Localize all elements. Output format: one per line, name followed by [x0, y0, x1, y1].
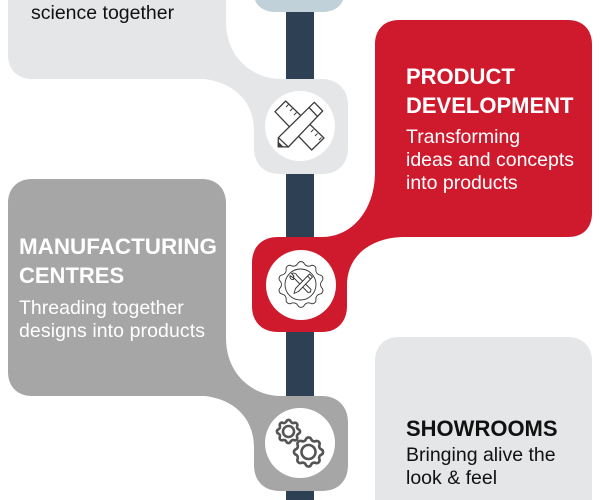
heading: product development: PRODUCT — [406, 64, 515, 89]
text: showrooms description: look & feel — [406, 467, 497, 489]
heading: showrooms: SHOWROOMS — [406, 416, 558, 441]
panel: manufacturing centres — [8, 179, 348, 491]
panel: product development — [252, 20, 592, 332]
panel: manufacturing centres: CENTRES — [19, 263, 124, 288]
panel: science — [8, 0, 348, 174]
text: product development description — [406, 126, 574, 194]
panel: product development: DEVELOPMENT — [406, 93, 574, 118]
icon: gears — [265, 408, 335, 478]
panel: showrooms — [375, 337, 592, 500]
text: manufacturing description: designs into products — [19, 320, 205, 342]
icon: gear with tools — [266, 250, 336, 320]
text: showrooms description: Bringing alive the — [406, 444, 556, 466]
science text: science together — [31, 2, 175, 24]
text: product development description: Transforming — [406, 126, 520, 148]
timeline bar — [286, 0, 314, 500]
text: showrooms description — [406, 444, 556, 489]
text: manufacturing description — [19, 297, 205, 342]
heading: manufacturing centres: MANUFACTURING — [19, 234, 217, 259]
top node fragment — [255, 0, 343, 12]
text: manufacturing description: Threading together — [19, 297, 184, 319]
text: product development description: into products — [406, 172, 518, 194]
icon: ruler and pencil — [265, 91, 335, 161]
text: product development description: ideas and concepts — [406, 149, 574, 171]
